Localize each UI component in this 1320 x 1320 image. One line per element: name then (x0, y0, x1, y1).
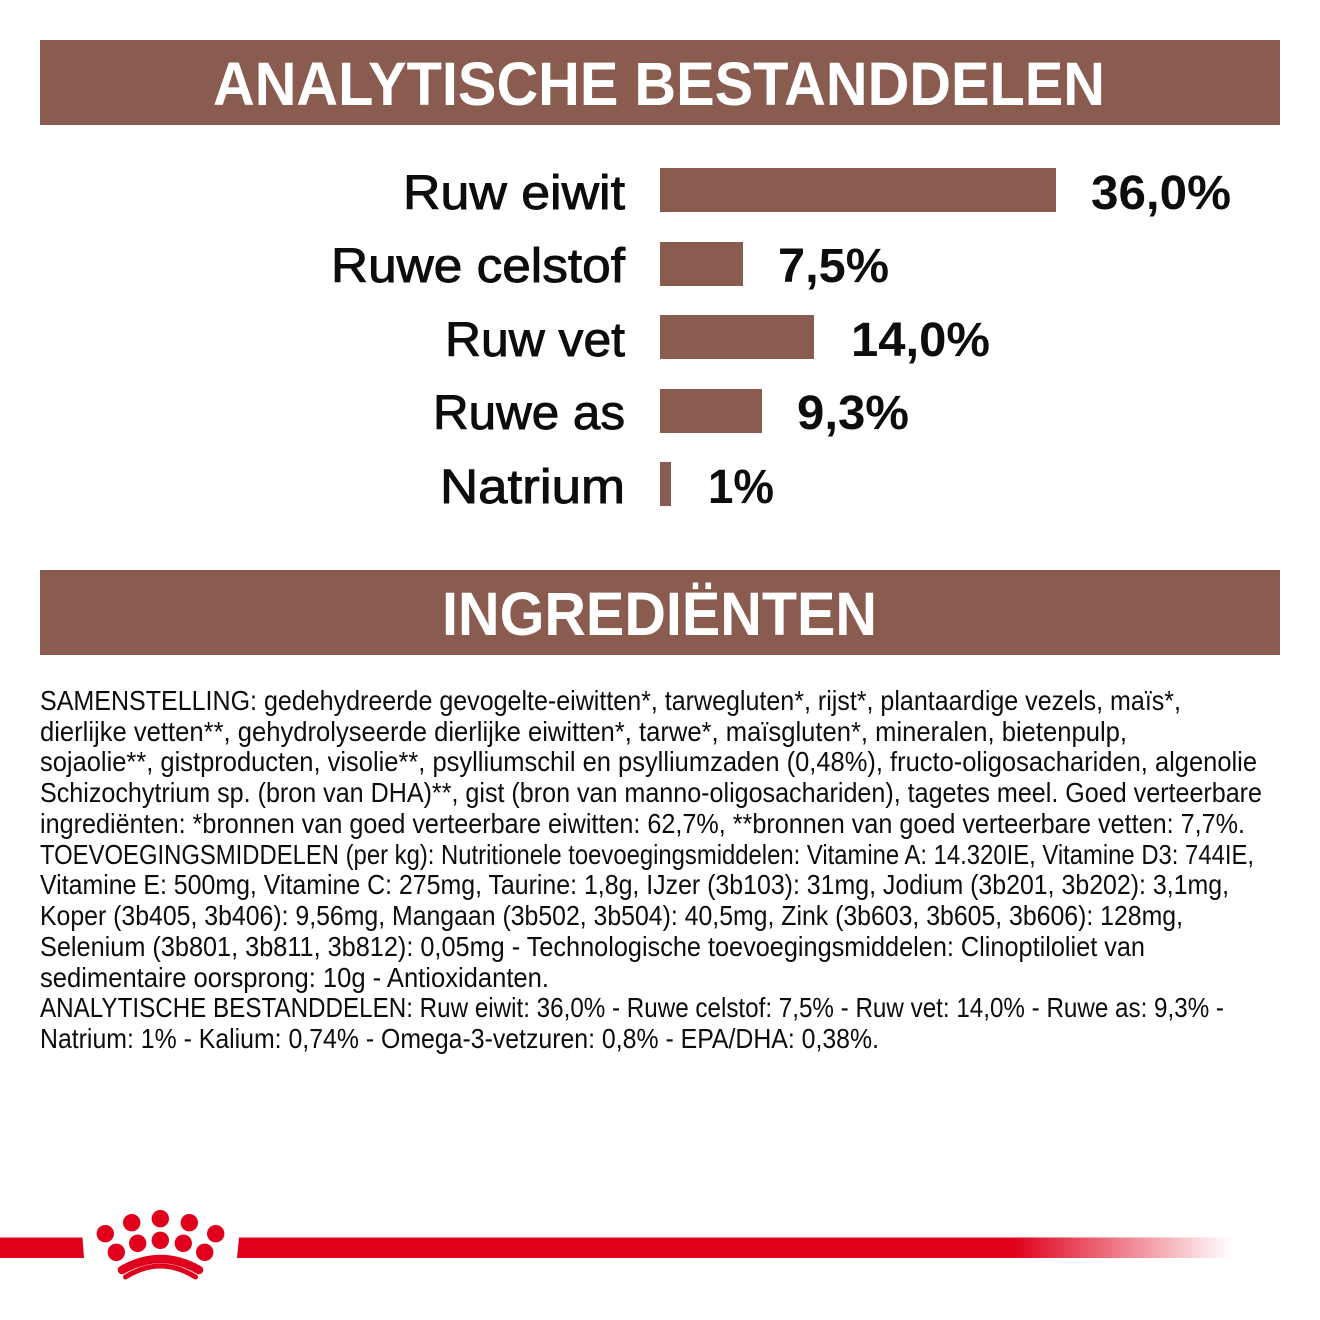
footer bar: left (0, 1238, 84, 1258)
row: Ruw eiwit (403, 167, 1231, 220)
row: Ruwe celstof: 7,5% (778, 240, 889, 293)
row: Ruwe as: 9,3% (797, 387, 909, 440)
text block: composition: Selenium (3b801, 3b811, 3b812): 0,05mg - Technologische toevoegingsmiddelen: Clinoptiloliet van (40, 931, 1145, 962)
text block: composition: dierlijke vetten**, gehydrolyseerde dierlijke eiwitten*, tarwe*, maïsgluten*, mineralen, bietenpulp, (40, 716, 1127, 747)
row: Ruwe as: Ruwe as (433, 387, 625, 440)
row: Ruw eiwit: 36,0% (1091, 167, 1231, 220)
text block: composition (40, 685, 1262, 1054)
row: Ruwe as (433, 387, 909, 440)
row: Ruw vet: 14,0% (851, 314, 990, 367)
icon: royal crown logo (97, 1210, 224, 1277)
text block: composition: Koper (3b405, 3b406): 9,56mg, Mangaan (3b502, 3b504): 40,5mg, Zink (3b603, 3b605, 3b606): 128mg, (40, 900, 1183, 931)
bar chart: analytical constituents (331, 167, 1231, 514)
row: Natrium: 1% (708, 461, 774, 514)
text block: composition: SAMENSTELLING: gedehydreerde gevogelte-eiwitten*, tarwegluten*, rijst*, plantaardige vezels, maïs*, (40, 685, 1181, 716)
row: Natrium: Natrium (440, 461, 625, 514)
heading: ingrediënten (40, 570, 1280, 655)
row: Natrium (440, 461, 774, 514)
text block: composition: Natrium: 1% - Kalium: 0,74% - Omega-3-vetzuren: 0,8% - EPA/DHA: 0,38%. (40, 1023, 879, 1054)
heading: analytische bestanddelen (40, 40, 1280, 125)
row: Ruw eiwit: Ruw eiwit (403, 167, 625, 220)
row: Ruwe celstof (331, 240, 889, 293)
heading: analytische bestanddelen: ANALYTISCHE BESTANDDELEN (213, 50, 1105, 118)
text block: composition: sedimentaire oorsprong: 10g - Antioxidanten. (40, 962, 549, 993)
row: Ruwe celstof: Ruwe celstof (331, 240, 626, 293)
footer bar: right fading (237, 1238, 1232, 1258)
row: Ruw vet (445, 314, 990, 367)
heading: ingrediënten: INGREDIËNTEN (442, 580, 877, 648)
row: Ruw vet: Ruw vet (445, 314, 625, 367)
